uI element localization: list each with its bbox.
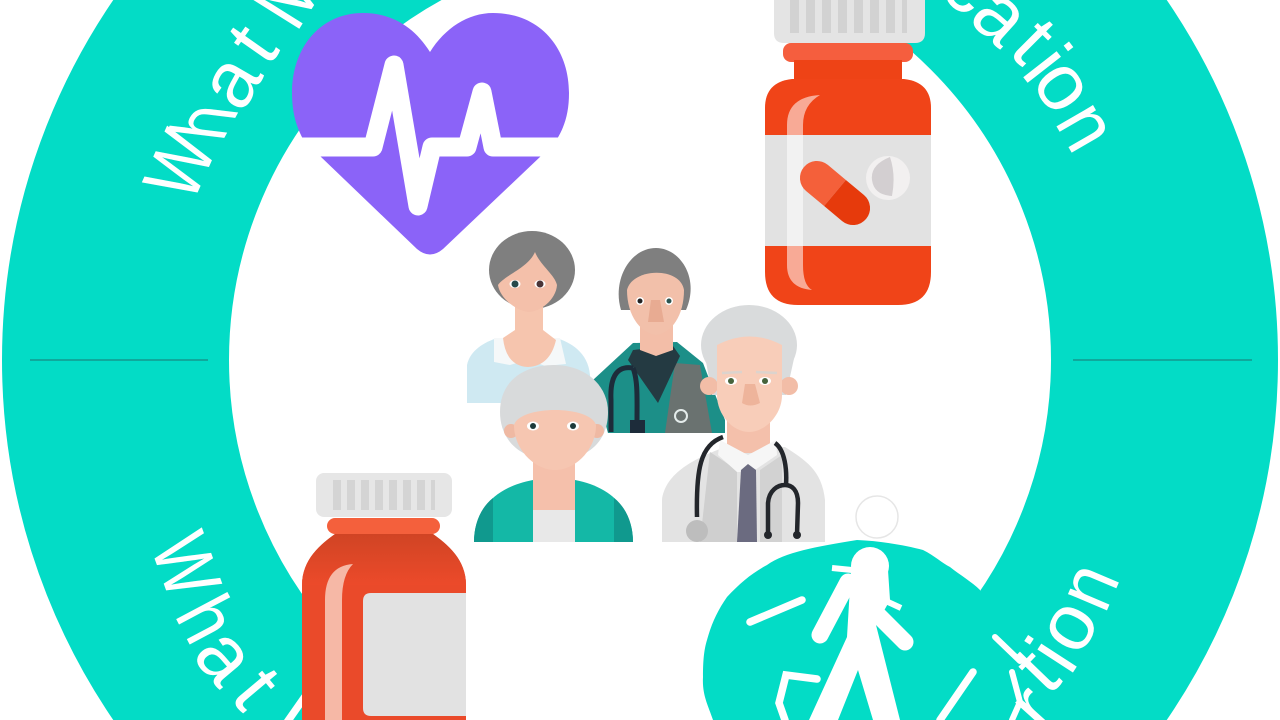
bottle body [765, 79, 931, 305]
ring label: bottom right: n [1039, 550, 1137, 622]
ring label: bottom left: a [178, 610, 275, 701]
person: elderly woman in teal [474, 365, 633, 542]
red capsule [793, 154, 877, 232]
ring label: top right: t [995, 1, 1074, 80]
ring label: top right: o [1016, 41, 1115, 128]
ring label: bottom left: h [159, 581, 256, 656]
bottle body [302, 532, 466, 720]
ring label: top left [125, 0, 344, 212]
person: woman in light blue [467, 231, 590, 403]
ring label: top left: W [125, 118, 234, 212]
ring label: bottom left: W [133, 521, 238, 609]
person: doctor in green scrubs [593, 248, 725, 433]
ring label: top right: i [1007, 29, 1088, 97]
bottle cap [316, 473, 452, 517]
faint circle [856, 496, 898, 538]
icon: medicine bottle with blank label [302, 473, 466, 720]
icon: heart with pulse [292, 13, 569, 254]
ring label: top left: a [180, 39, 279, 122]
icon: walking person badge [703, 496, 980, 720]
ring label: bottom right: i [1010, 623, 1094, 686]
icon: medicine bottle with capsule [765, 0, 931, 305]
motion lines [750, 600, 973, 720]
ring label: bottom right [989, 550, 1137, 720]
person: senior doctor in white coat [662, 305, 825, 542]
ring label: top left: t [209, 8, 295, 78]
ring label: bottom right: o [1017, 583, 1116, 666]
ring label: top right [926, 0, 1136, 166]
teal blob [703, 540, 980, 720]
bottle cap [774, 0, 925, 43]
illustration: group of people [467, 231, 825, 542]
ring label: top left: h [151, 100, 257, 144]
ring label: top right: n [1039, 86, 1136, 166]
ring label: bottom left [133, 521, 328, 720]
blank label [363, 593, 466, 716]
walking figure [809, 547, 905, 720]
ring label: bottom right: t [996, 631, 1076, 709]
white tablet [866, 156, 910, 200]
